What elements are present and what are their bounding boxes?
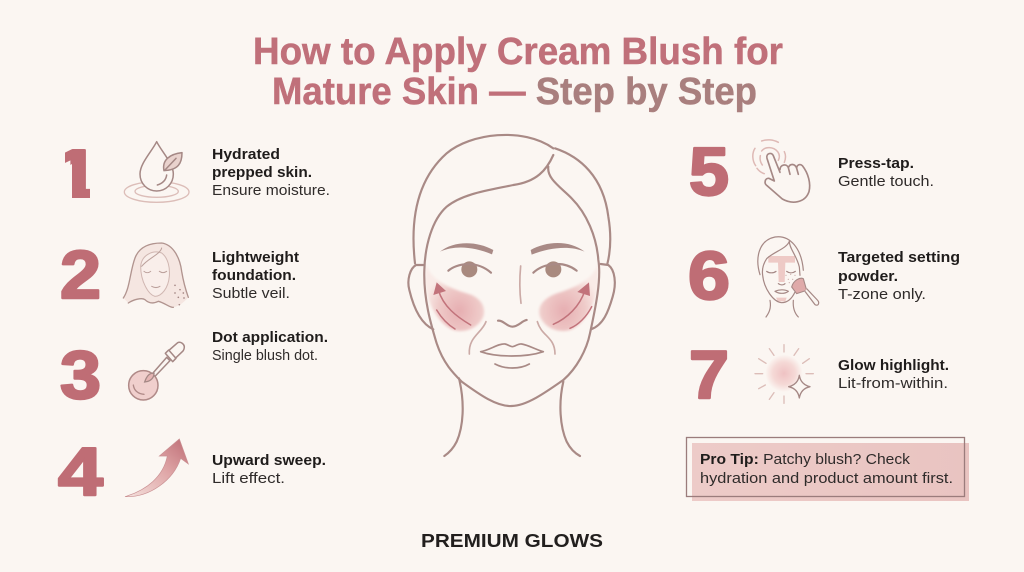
number 6: 6 [688, 238, 730, 314]
number 3: 3 [60, 337, 101, 413]
number 7: 7 [689, 337, 729, 413]
step 2 text: foundation. [212, 268, 296, 284]
step 2 text [212, 250, 299, 302]
title: Mature Skin — Step by Step [272, 71, 757, 113]
step 3 text: Single blush dot. [212, 348, 318, 364]
icon: face with foundation veil [123, 243, 188, 307]
eyebrows [440, 243, 585, 255]
blush zones [425, 263, 598, 331]
step 6 text: T-zone only. [838, 287, 926, 303]
step 7 text: Glow highlight. [838, 358, 949, 374]
number 1: 1 [51, 136, 101, 212]
step 4 text [212, 453, 326, 487]
number 5: 5 [689, 134, 729, 210]
upward blush arrows [433, 282, 592, 329]
nose [498, 266, 527, 327]
lips [481, 344, 543, 368]
step 7 [689, 337, 949, 413]
step 5 text [838, 156, 934, 190]
step 7 text: Lit-from-within. [838, 376, 948, 392]
icon: glow and sparkle [755, 345, 813, 403]
step 3 [60, 330, 328, 413]
callout: pro tip: hydration and product amount first. [700, 471, 953, 487]
smile lines [469, 322, 555, 354]
icon: dropper and blush dot [129, 342, 184, 400]
step 3 text: Dot application. [212, 330, 328, 346]
icon: face with setting powder brush [758, 237, 819, 317]
step 1 text: Hydrated [212, 147, 280, 163]
number 4: 4 [58, 434, 103, 510]
step 6 text: powder. [838, 269, 898, 285]
step 6 text: Targeted setting [838, 250, 960, 266]
step 1 text: Ensure moisture. [212, 183, 330, 199]
step 4 [58, 434, 326, 510]
step 5 text: Gentle touch. [838, 174, 934, 190]
brand footer: PREMIUM GLOWS [421, 531, 603, 551]
callout: pro tip [686, 438, 969, 501]
callout: pro tip: Pro Tip: Patchy blush? Check [700, 452, 911, 468]
eyes [448, 261, 577, 277]
step 6 text [838, 250, 960, 303]
step 4 text: Lift effect. [212, 471, 285, 487]
step 1 text: prepped skin. [212, 165, 312, 181]
step 1 text [212, 147, 330, 199]
number 2: 2 [60, 237, 101, 313]
title [253, 31, 783, 113]
title: How to Apply Cream Blush for [253, 31, 783, 73]
step 5 [689, 134, 934, 210]
step 3 text [212, 330, 328, 364]
step 5 text: Press-tap. [838, 156, 914, 172]
step 6 [688, 237, 960, 317]
step 4 text: Upward sweep. [212, 453, 326, 469]
step 2 [60, 237, 299, 313]
icon: water drop and leaf [124, 142, 189, 202]
icon: upward sweep arrow [125, 439, 188, 497]
central face illustration [408, 135, 615, 456]
step 2 text: Lightweight [212, 250, 299, 266]
icon: tapping hand [753, 140, 810, 202]
step 2 text: Subtle veil. [212, 286, 290, 302]
step 1 [65, 140, 329, 203]
hair and face outline [408, 135, 615, 456]
step 7 text [838, 358, 949, 392]
